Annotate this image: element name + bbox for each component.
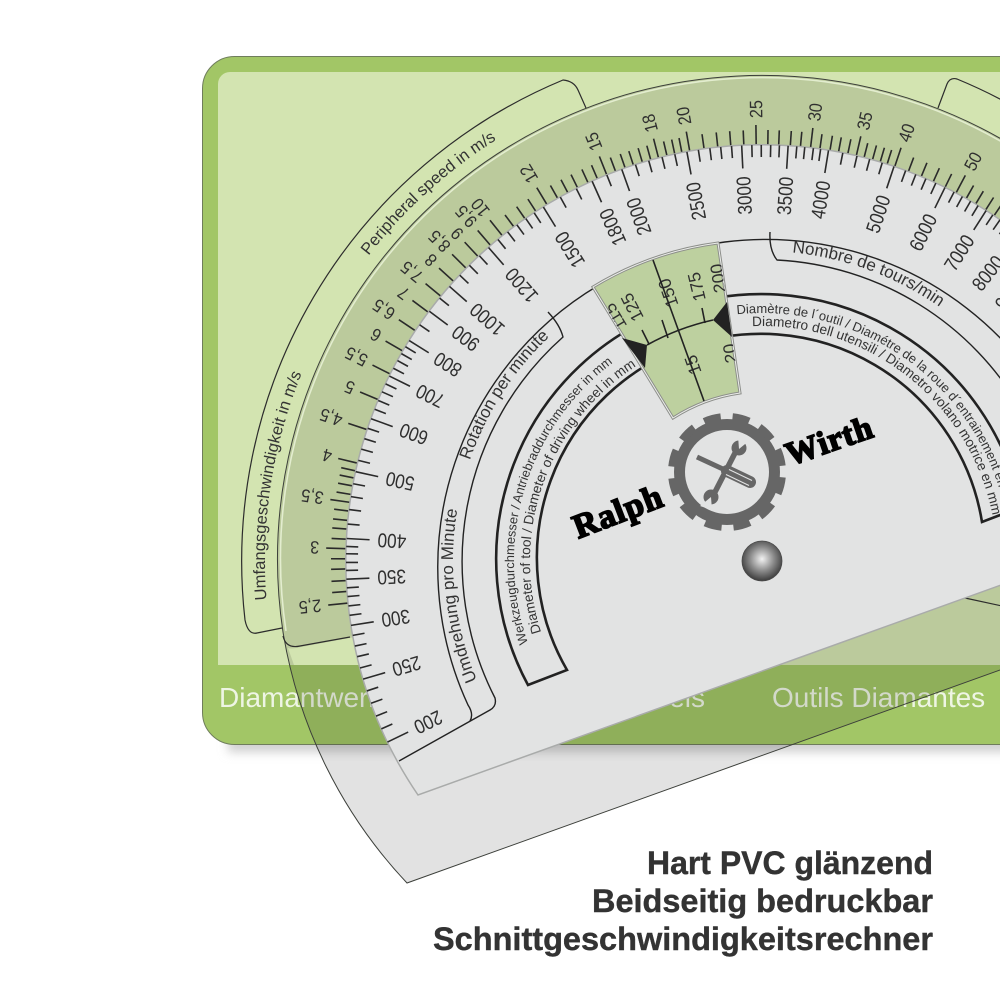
outer scale labels (m/s): 9 <box>447 223 468 243</box>
rpm scale labels: 1500 <box>550 227 589 272</box>
outer scale labels (m/s): 50 <box>960 149 986 174</box>
rpm scale labels: 250 <box>390 651 424 681</box>
rpm scale labels: 7000 <box>939 231 979 275</box>
footer band labels on the green card: Diamond Wheels <box>492 682 705 713</box>
caption text <box>433 845 933 957</box>
caption text: Schnittgeschwindigkeitsrechner <box>433 921 933 957</box>
rpm scale labels: 500 <box>384 467 416 495</box>
outer scale labels (m/s): 7 <box>394 282 413 304</box>
label text: Umdrehung pro Minute: Umdrehung pro Minute <box>441 509 476 684</box>
rpm scale labels: 200 <box>410 706 446 739</box>
rivet <box>742 541 782 581</box>
outer scale labels (m/s): 10 <box>467 194 494 221</box>
outer scale ticks (m/s) <box>326 125 1000 605</box>
outer scale labels (m/s): 15 <box>581 129 607 153</box>
outer scale labels (m/s): 12 <box>516 161 542 186</box>
panel: green card background <box>202 56 1000 752</box>
rpm scale labels: 4000 <box>806 179 835 220</box>
top disc sheet <box>346 145 1000 795</box>
window scale labels: 125 <box>617 290 648 325</box>
rpm scale labels: 3500 <box>773 176 797 216</box>
outer scale labels (m/s): 5,5 <box>342 342 371 370</box>
outer scale labels (m/s): 35 <box>853 110 877 132</box>
label band: rotation per minute outline <box>399 232 1000 761</box>
outer scale labels (m/s) <box>298 100 986 617</box>
rpm scale labels: 400 <box>377 529 407 553</box>
outer scale labels (m/s): 9,5 <box>451 201 481 231</box>
caption text: Hart PVC glänzend <box>647 845 933 881</box>
rpm scale labels: 2500 <box>681 180 711 222</box>
window pointer line and ticks <box>642 260 713 401</box>
footer band labels on the green card <box>219 682 985 713</box>
outer scale labels (m/s): 3,5 <box>300 485 325 508</box>
outer transparent sheet <box>278 75 1000 883</box>
rpm scale labels: 5000 <box>861 192 895 236</box>
footer band labels on the green card: Outils Diamantes <box>772 682 985 713</box>
window scale labels: 115 <box>599 300 631 334</box>
outer scale labels (m/s): 4,5 <box>317 404 345 430</box>
rpm scale labels: 6000 <box>904 210 942 255</box>
diameter text right, line 2: Diametro dell utensili / Diametro volano motrice en mm <box>753 316 1000 514</box>
window scale labels: 15 <box>680 352 706 377</box>
outer scale labels (m/s): 8,5 <box>425 226 455 256</box>
diameter text left, line 2: Diameter of tool / Diameter of driving wheel in mm <box>520 361 636 634</box>
window scale labels <box>608 264 736 374</box>
footer band labels on the green card: Diamantwerkzeuge <box>219 682 459 713</box>
window scale labels: 200 <box>706 262 730 294</box>
outer scale labels (m/s): 30 <box>804 102 826 122</box>
label text: Umfangsgeschwindigkeit: Umfangsgeschwindigkeit in m/s <box>253 372 301 600</box>
outer scale labels (m/s): 25 <box>746 100 767 118</box>
caption text: Beidseitig bedruckbar <box>592 883 933 919</box>
rpm scale labels: 700 <box>412 380 448 413</box>
diameter text left, line 1: Werkzeugdurchmesser / Antriebraddurchmesser in mm <box>504 358 612 646</box>
outer ring bottom end <box>283 598 1000 647</box>
logo text: Wirth: Wirth <box>781 410 878 473</box>
rpm scale labels: 1800 <box>595 205 631 249</box>
rpm scale labels: 350 <box>377 565 406 589</box>
rpm scale labels: 300 <box>380 605 412 632</box>
diameter band outline <box>496 294 1000 685</box>
logo text: Ralph: Ralph <box>568 478 669 546</box>
rpm scale labels: 600 <box>396 419 431 450</box>
outer scale labels (m/s): 2,5 <box>298 595 322 617</box>
label band: peripheral speed outline <box>242 79 1000 633</box>
outer scale labels (m/s): 5 <box>342 376 358 398</box>
rpm scale labels: 1000 <box>465 298 509 341</box>
window scale labels: 20 <box>719 342 742 365</box>
rpm scale labels <box>377 176 1000 739</box>
outer scale labels (m/s): 6,5 <box>369 294 399 324</box>
unprinted light patch below the outer ring <box>288 636 400 665</box>
outer scale labels (m/s): 7,5 <box>397 257 427 286</box>
logo: gear with tools <box>667 412 787 532</box>
rpm scale labels: 2000 <box>622 195 656 238</box>
label text: Nombre de tours/min: Nombre de tours/min <box>794 241 943 306</box>
outer scale labels (m/s): 4 <box>320 444 334 466</box>
outer scale labels (m/s): 18 <box>638 112 662 134</box>
rpm scale labels: 1200 <box>500 263 543 307</box>
outer scale labels (m/s): 8 <box>421 249 441 270</box>
window black markers <box>622 302 732 368</box>
ring double edge line <box>281 78 1000 631</box>
label text: Peripheral speed: Peripheral speed in m/s <box>360 134 495 255</box>
window scale labels: 150 <box>654 276 682 310</box>
outer scale labels (m/s): 3 <box>310 537 320 557</box>
label text: Rotation per minute: Rotation per minute <box>459 332 548 459</box>
rpm scale labels: 900 <box>447 321 484 356</box>
window scale labels: 175 <box>684 270 710 303</box>
outer scale labels (m/s): 6 <box>367 324 385 346</box>
rpm scale labels: 800 <box>430 347 466 382</box>
outer scale labels (m/s): 20 <box>673 105 696 126</box>
rpm scale ticks <box>346 145 1000 742</box>
outer scale labels (m/s): 40 <box>895 121 919 145</box>
reading window <box>593 243 742 418</box>
rpm scale labels: 3000 <box>732 176 756 215</box>
